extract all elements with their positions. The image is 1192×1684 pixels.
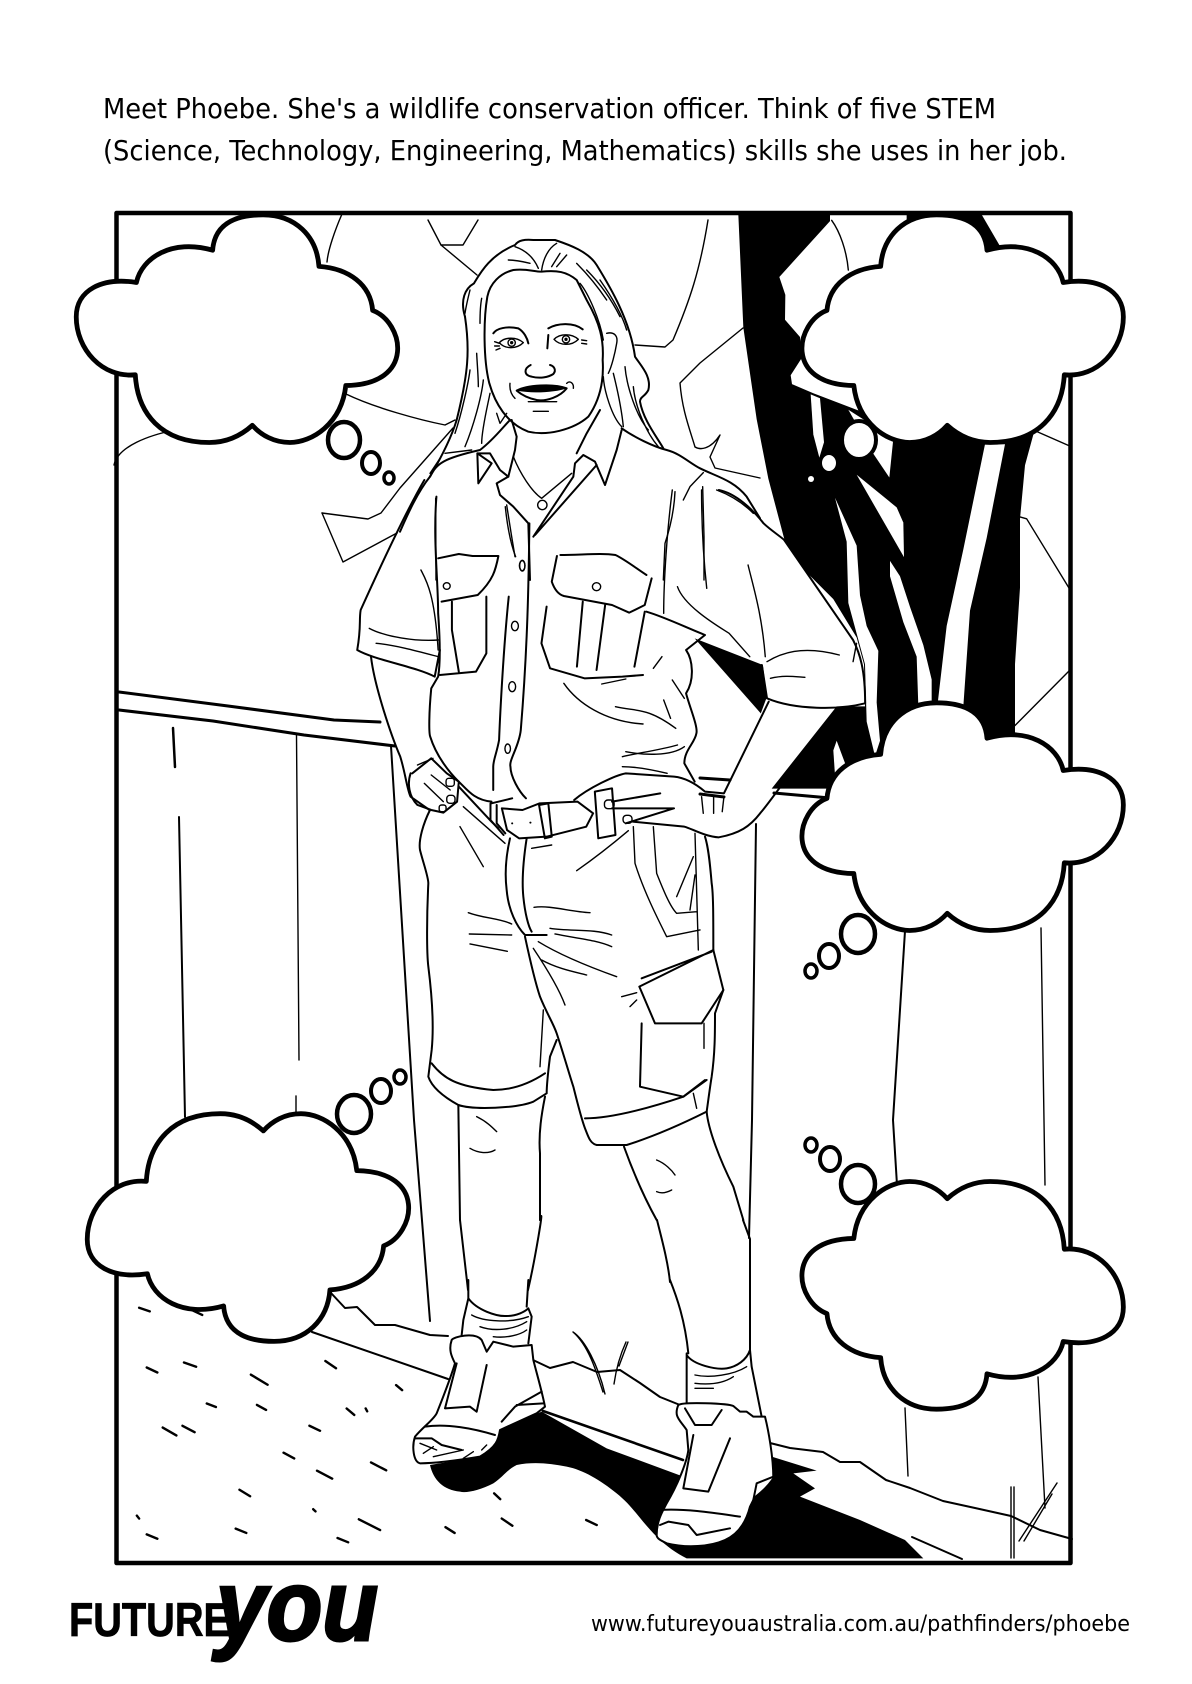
shorts — [420, 807, 743, 1220]
handrail — [119, 692, 830, 798]
thought bubbles: bottom right — [805, 1138, 875, 1203]
tree trunk — [738, 215, 1070, 789]
shirt folds — [564, 657, 684, 773]
thought cloud: bottom left — [87, 1114, 409, 1341]
heading: instructions — [103, 93, 1067, 167]
thought cloud: top right — [802, 215, 1123, 442]
right pocket — [552, 554, 652, 613]
figure: Phoebe — [357, 240, 865, 1546]
picture frame — [116, 213, 1070, 1563]
heading: instructions: Meet Phoebe. She's a wildlife conservation officer. Think of five STEM — [103, 93, 996, 125]
left pocket — [438, 554, 498, 602]
logo: FutureYou: FUTURE — [69, 1594, 230, 1647]
thighs — [458, 1097, 743, 1220]
logo: FutureYou — [69, 1550, 378, 1662]
fence — [173, 728, 1045, 1508]
ground specks — [137, 1308, 597, 1542]
thought bubbles: top right — [808, 421, 876, 482]
thought cloud: bottom right — [802, 1182, 1123, 1409]
thought cloud: top left — [76, 215, 398, 442]
thought bubbles: middle right — [805, 915, 875, 978]
head and hair — [430, 240, 663, 477]
background rocks — [114, 214, 760, 562]
website url: www.futureyouaustralia.com.au/pathfinders/phoebe — [591, 1611, 1130, 1637]
left boot and sock — [413, 1280, 545, 1463]
thought cloud: middle right — [802, 703, 1123, 930]
logo: FutureYou: you — [211, 1550, 378, 1662]
collar and shoulders — [400, 410, 760, 580]
right forearm and hand — [574, 702, 769, 800]
belt — [459, 787, 615, 838]
right sleeve — [719, 490, 865, 708]
grass tufts — [573, 1332, 1057, 1558]
thought bubbles: top left — [328, 422, 394, 484]
left arm and hand — [371, 657, 430, 810]
ground and wall lines — [312, 1293, 1072, 1559]
shadow under boots — [430, 1412, 923, 1558]
lower legs — [460, 1216, 750, 1290]
thought bubbles: bottom left — [337, 1070, 406, 1133]
heading: instructions: (Science, Technology, Engineering, Mathematics) skills she uses in her job. — [103, 135, 1067, 167]
shirt torso and pockets — [357, 480, 865, 837]
right boot and sock — [657, 1280, 773, 1546]
